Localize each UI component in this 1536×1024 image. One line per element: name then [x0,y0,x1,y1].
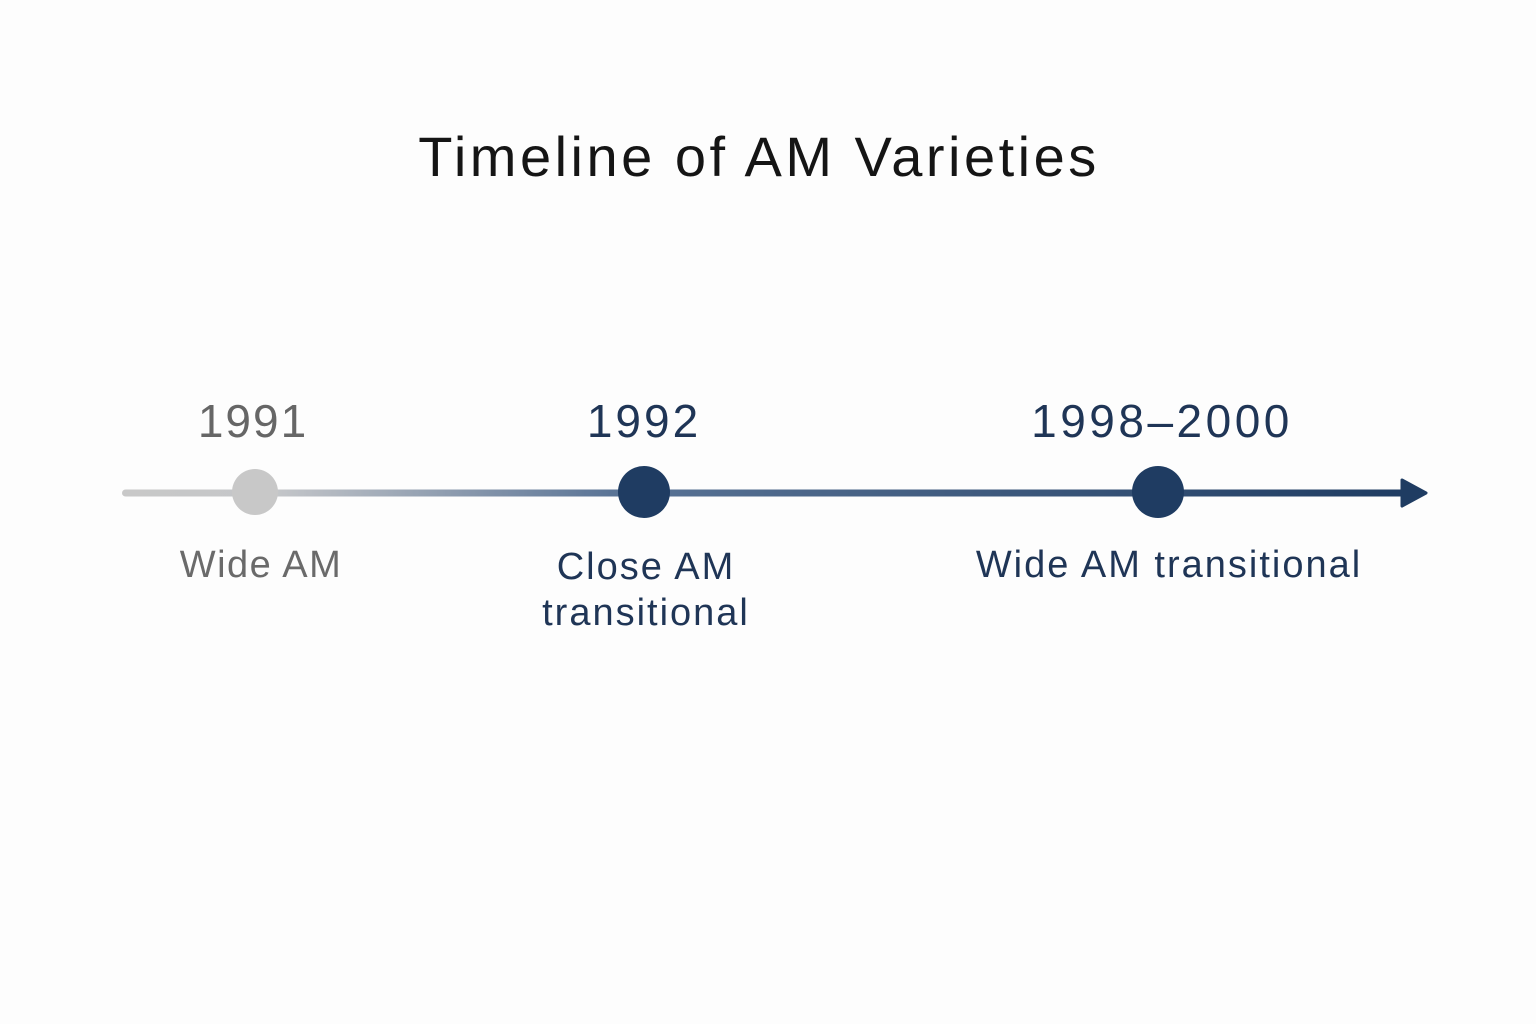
year 1991: 1991 [198,395,308,447]
marker 1998-2000 [1132,466,1184,518]
year 1992: 1992 [587,395,701,447]
marker 1991 [232,469,278,515]
title: Timeline of AM Varieties [418,125,1100,188]
timeline axis arrow [122,480,1426,506]
label close AM transitional: Close AM [557,546,735,588]
label close AM transitional: transitional [542,592,750,634]
label wide AM: Wide AM [180,544,342,586]
year 1998-2000: 1998–2000 [1031,395,1293,447]
label wide AM transitional: Wide AM transitional [976,544,1362,586]
label close AM transitional [542,546,750,634]
marker 1992 [618,466,670,518]
